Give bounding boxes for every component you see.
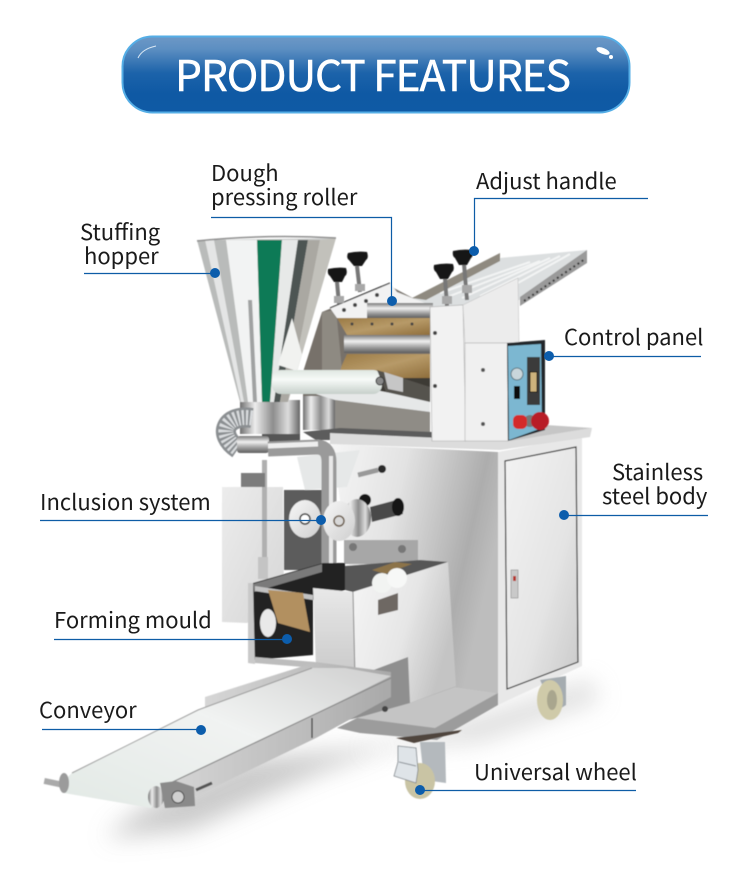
label: conveyor: Conveyor [39,693,137,725]
label: inclusion system: Inclusion system [40,485,211,517]
left rear panel [222,460,324,623]
base plate [337,687,498,743]
label: stainless steel body: steel body [602,479,708,511]
label: dough pressing roller: pressing roller [211,180,358,212]
label: stainless steel body: Stainless [612,455,703,487]
feed tray at rear [412,250,587,310]
rear caster wheel [537,676,566,720]
adjust handle knobs [328,250,473,306]
label: forming mould: Forming mould [54,603,212,635]
label: control panel: Control panel [564,320,703,352]
label: conveyor [39,693,206,735]
label: stuffing hopper: hopper [84,239,159,271]
label: dough pressing roller [211,156,397,306]
label: stainless steel body [559,455,708,520]
title text: PRODUCT FEATURES [175,43,571,104]
label: stuffing hopper: Stuffing [80,215,161,247]
label: forming mould [54,603,292,644]
label: adjust handle [469,164,648,256]
label: universal wheel [415,755,637,795]
label: universal wheel: Universal wheel [474,755,637,787]
stuffing hopper [197,237,336,402]
front upright column [430,278,519,441]
front roller end [148,786,164,808]
label: adjust handle: Adjust handle [476,164,617,196]
cabinet door [505,447,578,689]
machine shadow [105,680,600,838]
label: control panel [544,320,703,361]
white front roller and bracket [272,370,430,402]
machine illustration [44,237,592,808]
forming box [313,588,355,677]
label: dough pressing roller: Dough [211,156,279,188]
dough pressing roller assembly [303,283,433,440]
feed pipe and funnel [268,444,386,580]
forming mould [248,560,456,722]
label: inclusion system [40,485,326,525]
label: stuffing hopper [80,215,220,278]
title banner [122,36,630,112]
control panel [465,340,549,441]
conveyor [44,662,391,808]
hopper base and hose [226,400,300,453]
cabinet body [330,425,592,705]
front caster wheel [394,742,446,799]
inclusion system rollers [289,494,418,564]
